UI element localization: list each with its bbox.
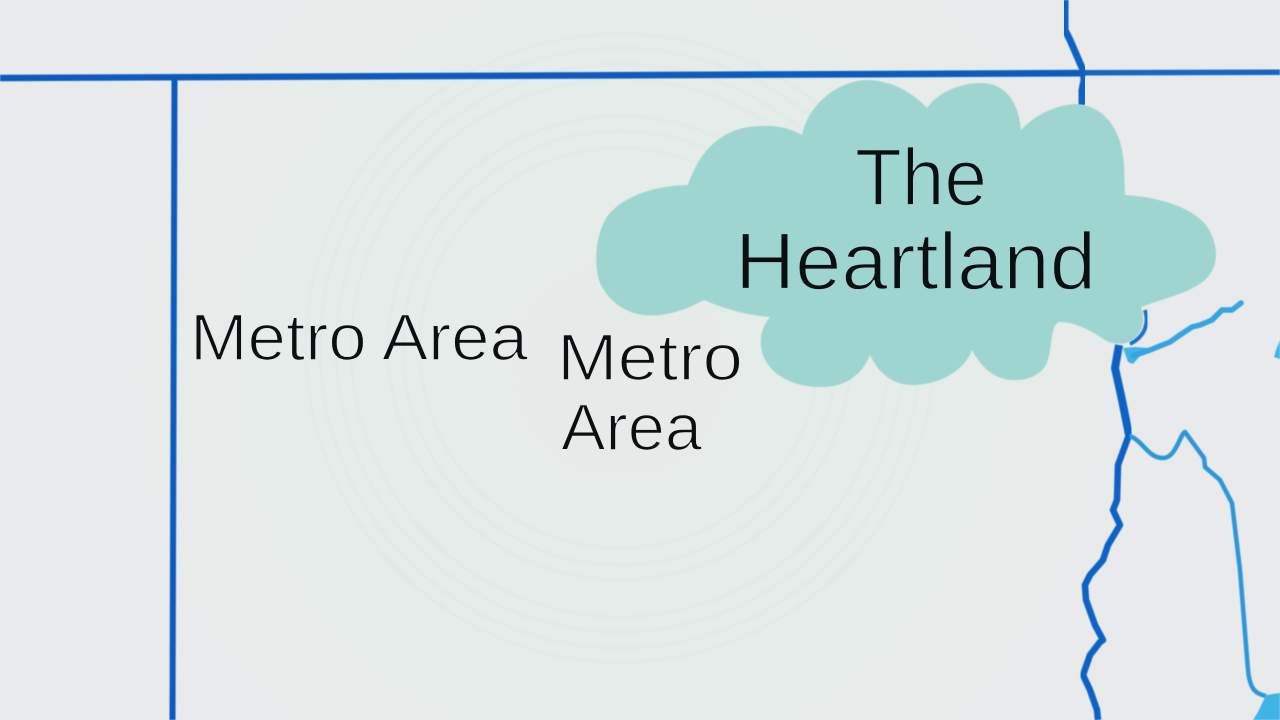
label: Metro Area, two lines [557, 320, 743, 464]
lake at right edge [1274, 340, 1280, 359]
label: The Heartland: The [855, 133, 987, 223]
label: The Heartland: Heartland [735, 217, 1096, 307]
label: Metro Area, single line: Metro Area [190, 300, 528, 374]
region: The Heartland [596, 80, 1216, 387]
river: small dark branch [1130, 310, 1147, 344]
label: Metro Area, two lines: Area [561, 390, 702, 464]
label: Metro Area, two lines: Metro [557, 320, 743, 394]
river: main dark blue channel, north [1065, 0, 1084, 105]
lake at lower right [1253, 693, 1280, 720]
label: The Heartland [735, 133, 1096, 307]
river: main dark blue channel, south [1083, 345, 1129, 720]
river: medium blue eastern branch [1130, 432, 1266, 696]
river: light blue tributary with lake [1123, 303, 1241, 364]
